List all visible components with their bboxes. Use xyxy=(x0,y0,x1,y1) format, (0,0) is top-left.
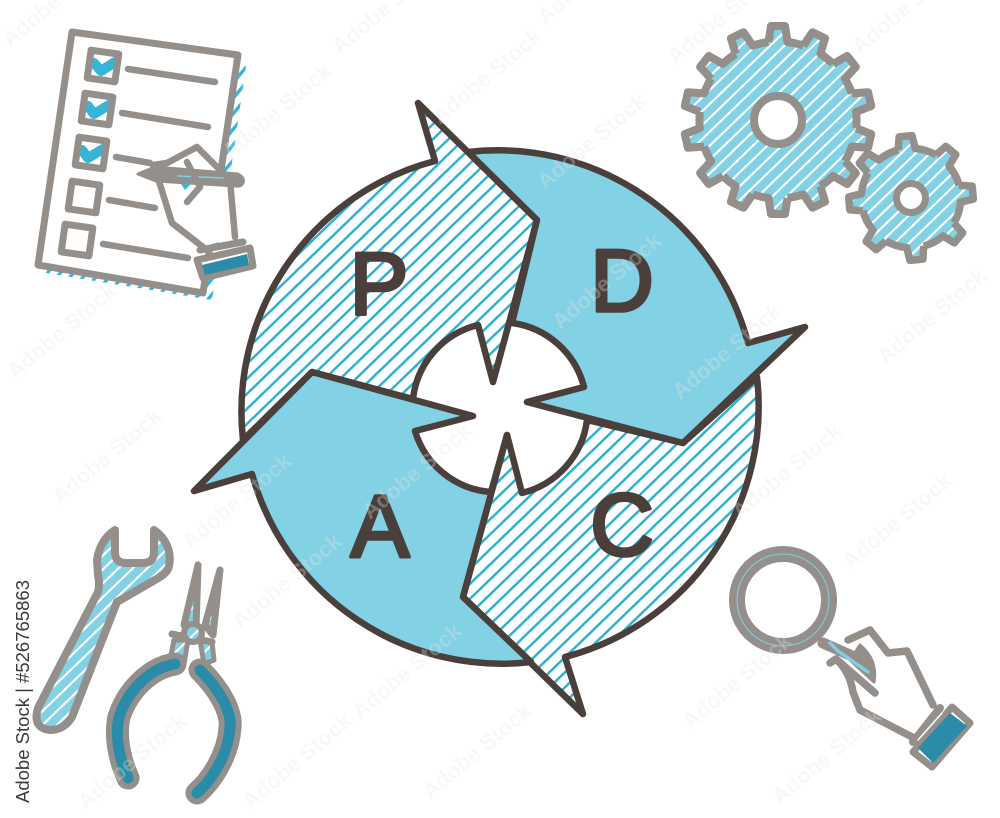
watermark pattern: Adobe Stock xyxy=(532,88,652,194)
letter C: C xyxy=(590,475,654,574)
handle xyxy=(823,643,850,655)
watermark pattern: Adobe Stock xyxy=(767,703,887,809)
checkboxes xyxy=(61,50,119,256)
small gear xyxy=(841,128,981,268)
watermark pattern: Adobe Stock xyxy=(357,418,477,524)
check marks xyxy=(82,62,115,158)
watermark pattern: Adobe Stock xyxy=(547,228,667,334)
watermark pattern: Adobe Stock xyxy=(727,418,847,524)
icon: pliers xyxy=(117,565,230,793)
watermark pattern: Adobe Stock xyxy=(417,698,537,804)
icon: checklist with writing hand xyxy=(38,32,253,300)
watermark pattern: Adobe Stock xyxy=(872,263,992,369)
watermark pattern: Adobe Stock xyxy=(47,403,167,509)
writing hand xyxy=(153,147,235,247)
lens ring xyxy=(737,554,829,646)
watermark pattern: Adobe Stock xyxy=(227,528,347,634)
watermark pattern: Adobe Stock xyxy=(72,708,192,814)
icon: wrench xyxy=(36,530,170,730)
icon: gears xyxy=(678,20,981,268)
stock image id caption: Adobe Stock | #526765863 xyxy=(13,580,33,803)
pliers jaws xyxy=(184,565,198,628)
letter D: D xyxy=(590,231,654,330)
cuff xyxy=(197,242,253,278)
watermark pattern: Adobe Stock xyxy=(177,448,297,554)
watermark pattern: Adobe Stock xyxy=(347,618,467,724)
watermark pattern: Adobe Stock xyxy=(217,58,337,164)
PDCA cycle diagram xyxy=(194,103,805,714)
arrow segment: Act xyxy=(194,372,531,664)
arrow segment: Plan xyxy=(241,103,537,440)
watermark pattern: Adobe Stock xyxy=(837,468,957,574)
letter A: A xyxy=(351,477,410,576)
paper shadow xyxy=(46,60,246,300)
large gear xyxy=(678,20,878,220)
hand xyxy=(848,630,933,705)
paper xyxy=(38,32,238,293)
watermark pattern: Adobe Stock xyxy=(427,23,547,129)
pen xyxy=(138,167,243,186)
cuff xyxy=(913,707,970,767)
pliers handles xyxy=(117,664,175,778)
watermark pattern: Adobe Stock xyxy=(237,708,357,814)
watermark pattern: Adobe Stock xyxy=(667,298,787,404)
icon: magnifying glass with hand xyxy=(737,554,970,767)
arrow segment: Check xyxy=(463,377,759,714)
arrow segment: Do xyxy=(468,150,805,443)
letter P: P xyxy=(350,234,408,333)
watermark pattern: Adobe Stock xyxy=(2,278,122,384)
watermark pattern: Adobe Stock xyxy=(677,628,797,734)
text lines xyxy=(103,69,215,258)
